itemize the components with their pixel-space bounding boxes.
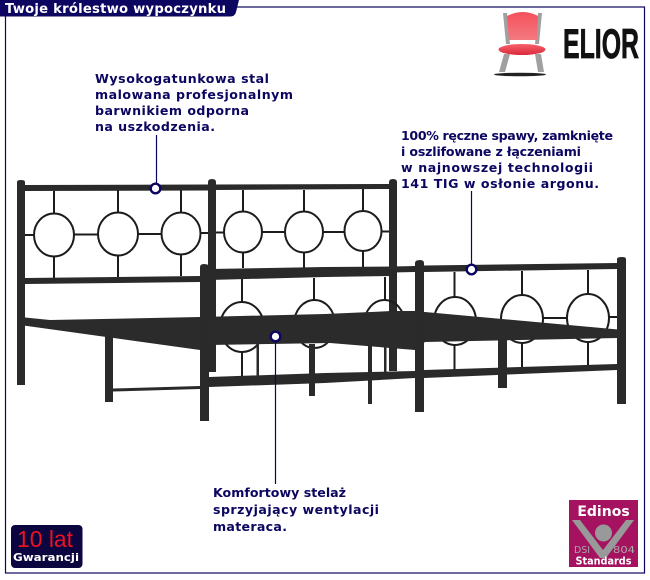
footboard circles bbox=[220, 270, 617, 376]
callout: welds: 141 TIG w osłonie argonu. bbox=[401, 176, 599, 191]
callout: slatted base: materaca. bbox=[213, 519, 287, 534]
badge: Edinos DSI 804 standards: DSI bbox=[574, 545, 590, 556]
badge: Edinos DSI 804 standards: 804 bbox=[613, 545, 635, 556]
callout: steel coating bbox=[95, 71, 293, 193]
badge: 10 year warranty bbox=[11, 525, 82, 568]
title bar: Twoje królestwo wypoczynku bbox=[5, 1, 226, 17]
badge: Edinos DSI 804 standards: Standards bbox=[576, 556, 632, 568]
badge: Edinos DSI 804 standards bbox=[569, 500, 638, 568]
callout: slatted base: Komfortowy stelaż bbox=[213, 485, 346, 500]
callout: steel coating: malowana profesjonalnym bbox=[95, 87, 293, 102]
mattress platform bbox=[20, 311, 618, 350]
badge: Edinos DSI 804 standards: Edinos bbox=[577, 504, 630, 520]
headboard bbox=[17, 179, 397, 385]
callout: steel coating: na uszkodzenia. bbox=[95, 119, 215, 134]
badge: 10 year warranty: 10 lat bbox=[17, 526, 74, 552]
icon: chair bbox=[494, 12, 546, 76]
callout: steel coating: barwnikiem odporna bbox=[95, 103, 249, 118]
callout: welds: i oszlifowane z łączeniami bbox=[401, 144, 581, 159]
callout: welds bbox=[401, 128, 613, 274]
callout: steel coating: Wysokogatunkowa stal bbox=[95, 71, 269, 86]
callout: slatted base bbox=[213, 332, 379, 534]
badge: 10 year warranty: Gwarancji bbox=[13, 551, 79, 564]
bed frame bbox=[17, 179, 626, 421]
callout: welds: 100% ręczne spawy, zamknięte bbox=[401, 128, 613, 143]
logo: Elior chair bbox=[494, 12, 639, 76]
callout: slatted base: sprzyjający wentylacji bbox=[213, 502, 379, 517]
legs and rails bbox=[105, 257, 626, 421]
callout: welds: w najnowszej technologii bbox=[401, 160, 593, 175]
